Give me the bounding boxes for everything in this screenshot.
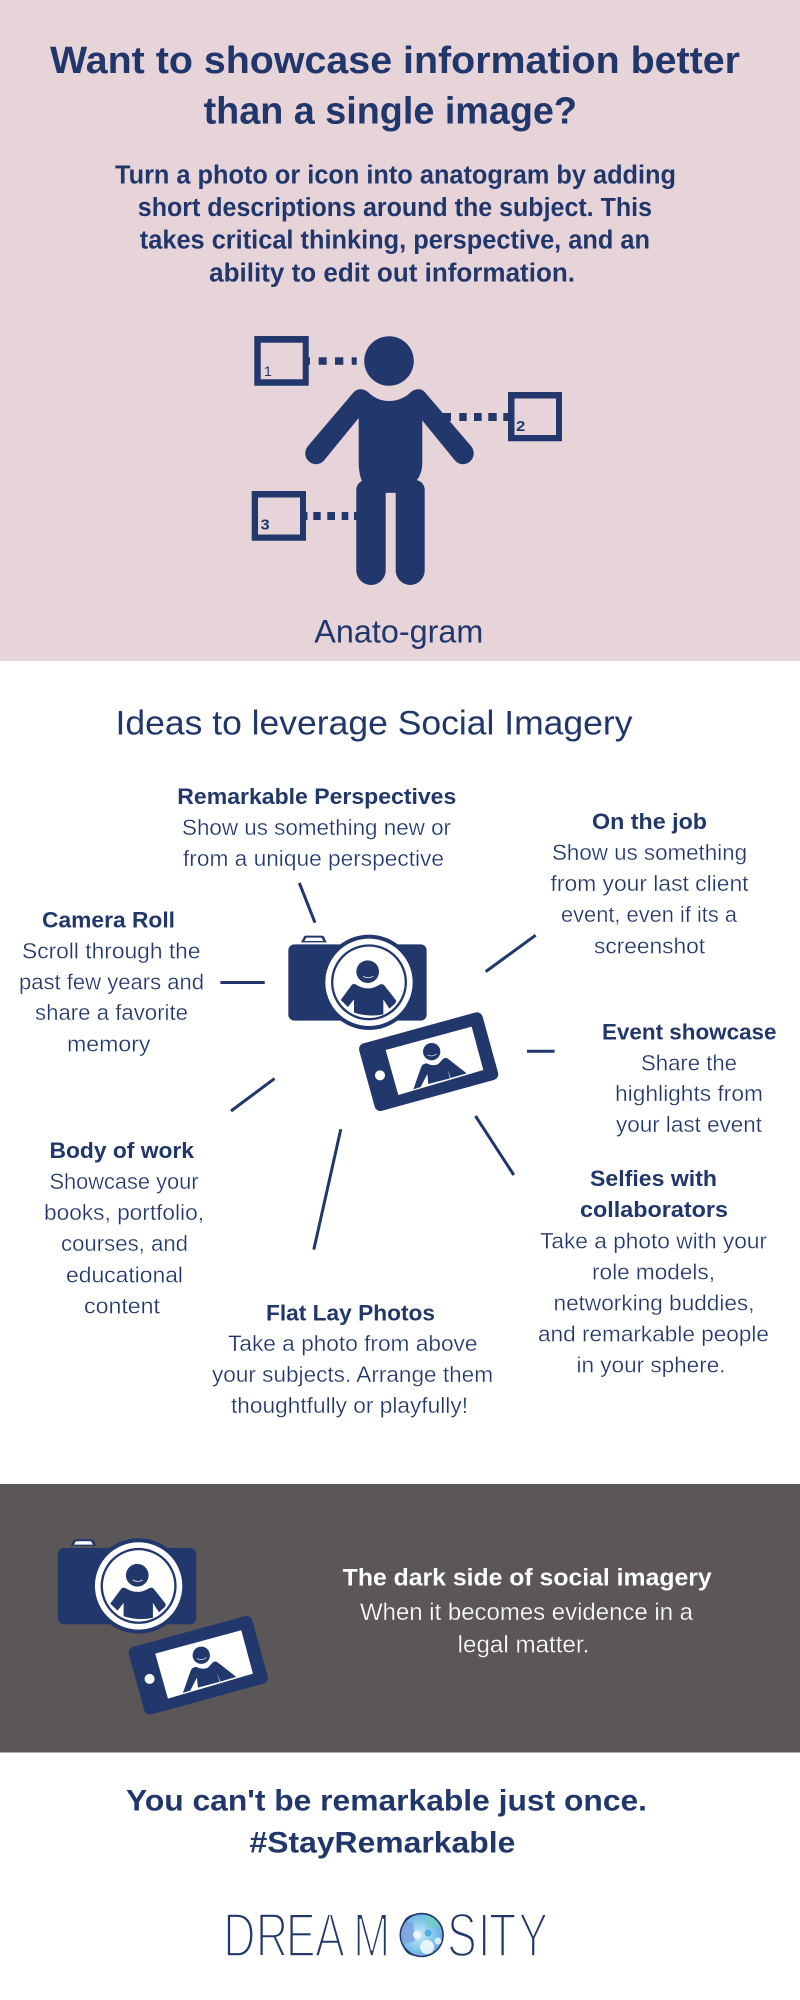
dark side text: When it becomes evidence in a <box>360 1599 694 1626</box>
idea: Flat Lay Photos: Take a photo from above <box>228 1331 478 1356</box>
idea: Flat Lay Photos: your subjects. Arrange them <box>212 1362 493 1387</box>
idea: Selfies with collaborators <box>538 1166 769 1377</box>
idea: Flat Lay Photos <box>212 1300 493 1418</box>
idea: Event showcase: Share the <box>641 1050 737 1075</box>
idea: Remarkable Perspectives <box>177 784 456 871</box>
idea: Event showcase <box>602 1019 776 1137</box>
panel: dark side of social imagery <box>0 1484 800 1752</box>
idea: Camera Roll <box>19 907 204 1057</box>
idea: Remarkable Perspectives: Remarkable Perspectives <box>177 784 456 809</box>
idea: Body of work: Showcase your <box>50 1169 199 1194</box>
idea: On the job: from your last client <box>550 871 749 896</box>
idea: Event showcase: highlights from <box>615 1081 763 1106</box>
idea: Camera Roll: Scroll through the <box>22 938 200 963</box>
icon: globe letter O <box>400 1914 443 1956</box>
idea: Flat Lay Photos: Flat Lay Photos <box>266 1300 435 1325</box>
icon: camera and phone <box>288 935 500 1112</box>
icon: phone <box>358 1011 500 1112</box>
intro paragraph <box>115 161 676 288</box>
idea: Body of work: content <box>84 1293 161 1318</box>
figure: person <box>305 336 474 585</box>
box 1 with connector <box>254 336 357 386</box>
idea: Body of work <box>44 1138 204 1318</box>
idea: Body of work: educational <box>66 1262 183 1288</box>
idea: Body of work: Body of work <box>50 1138 194 1163</box>
icon: phone <box>127 1615 269 1716</box>
idea: Camera Roll: past few years and <box>19 969 204 994</box>
idea: Camera Roll: share a favorite <box>35 1000 188 1025</box>
box 2 with connector <box>442 392 562 441</box>
icon: camera and phone on dark <box>58 1538 269 1716</box>
title <box>50 40 740 132</box>
idea: Selfies with collaborators: and remarkable people <box>538 1321 769 1346</box>
idea: Selfies with collaborators: collaborators <box>580 1197 728 1222</box>
idea: Selfies with collaborators: in your sphere. <box>576 1352 726 1377</box>
closing statement: You can't be remarkable just once. <box>126 1785 647 1818</box>
idea: On the job: screenshot <box>594 933 706 958</box>
panel: anatogram intro <box>0 0 800 661</box>
idea: Event showcase: your last event <box>616 1112 763 1137</box>
idea: Remarkable Perspectives: Show us something new or <box>182 815 451 840</box>
title: than a single image? <box>204 90 577 132</box>
box 3 with connector <box>252 491 358 541</box>
idea: On the job: Show us something <box>552 840 747 865</box>
panel: ideas to leverage social imagery <box>0 661 800 1484</box>
icon: anatogram figure with numbered boxes <box>252 336 562 585</box>
intro paragraph: Turn a photo or icon into anatogram by adding <box>115 161 676 189</box>
section heading: Ideas to leverage Social Imagery <box>116 704 632 742</box>
title: Want to showcase information better <box>50 40 740 82</box>
idea: On the job: event, even if its a <box>561 902 737 927</box>
box 1 with connector: 1 <box>264 363 272 379</box>
icon: camera <box>288 935 427 1030</box>
idea: Selfies with collaborators: Take a photo with your <box>540 1229 768 1254</box>
closing statement: #StayRemarkable <box>250 1827 515 1860</box>
logo: Dreamosity: DREAMOSITY <box>223 1902 548 1970</box>
idea: Body of work: books, portfolio, <box>44 1200 204 1225</box>
idea: Body of work: courses, and <box>61 1231 188 1256</box>
dark side text: The dark side of social imagery <box>343 1565 712 1592</box>
idea: On the job: On the job <box>592 809 707 834</box>
intro paragraph: takes critical thinking, perspective, and an <box>140 227 650 255</box>
closing statement <box>126 1785 647 1860</box>
idea: Camera Roll: Camera Roll <box>42 907 175 932</box>
dark side text <box>343 1565 712 1659</box>
radiating lines <box>220 883 555 1250</box>
idea: Remarkable Perspectives: from a unique perspective <box>183 846 444 871</box>
intro paragraph: short descriptions around the subject. This <box>138 194 652 222</box>
dark side text: legal matter. <box>458 1632 589 1659</box>
caption: Anato-gram: Anato-gram <box>314 614 483 650</box>
idea: Flat Lay Photos: thoughtfully or playfully! <box>231 1393 468 1418</box>
intro paragraph: ability to edit out information. <box>209 260 575 288</box>
icon: camera <box>58 1538 196 1634</box>
box 3 with connector: 3 <box>261 517 270 533</box>
box 2 with connector: 2 <box>516 419 526 435</box>
idea: Selfies with collaborators: networking buddies, <box>554 1290 754 1316</box>
idea: Camera Roll: memory <box>67 1032 151 1057</box>
idea: On the job <box>550 809 749 958</box>
idea: Selfies with collaborators: role models, <box>592 1260 715 1284</box>
idea: Selfies with collaborators: Selfies with <box>590 1166 717 1191</box>
idea: Event showcase: Event showcase <box>602 1019 776 1044</box>
